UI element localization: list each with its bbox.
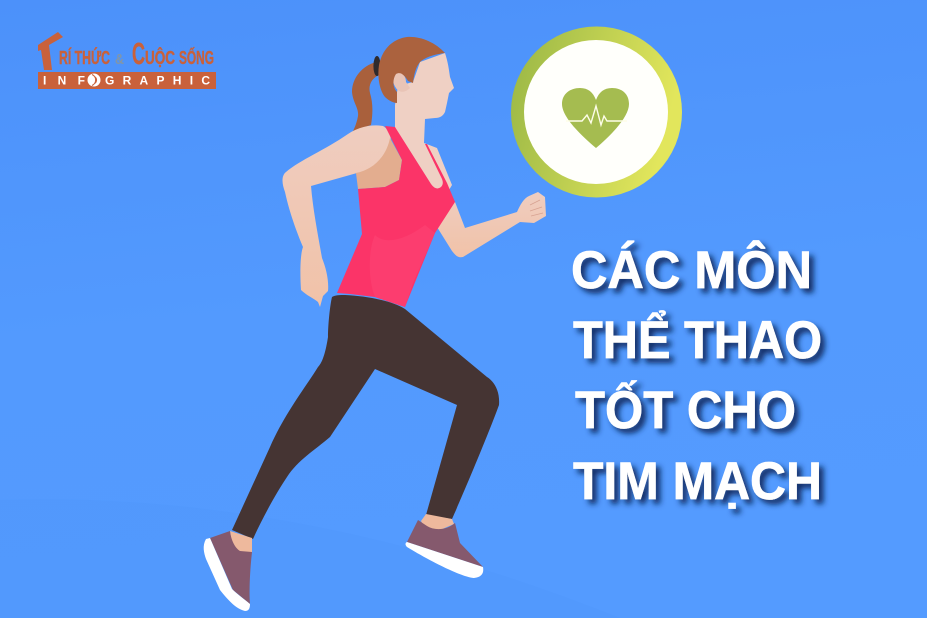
back arm — [282, 125, 391, 307]
logo infographic text: INF — [43, 74, 85, 88]
logo — [38, 32, 216, 89]
front shoe sole — [406, 542, 483, 578]
underarm shade — [356, 138, 402, 189]
top shading — [370, 225, 435, 307]
heart icon badge — [511, 26, 682, 198]
hand detail — [530, 200, 543, 216]
title line 4: TIM MẠCH — [573, 452, 822, 511]
logo infographic bar — [38, 72, 216, 89]
front shoe — [407, 520, 483, 567]
title line 3: TỐT CHO — [575, 380, 796, 440]
logo words tri thuc: RÍ THỨC — [59, 47, 110, 68]
logo word song: SỐNG — [179, 47, 214, 68]
ponytail — [352, 62, 379, 131]
logo wordmark — [59, 36, 214, 71]
hair tie — [373, 56, 381, 76]
logo roof letter T — [38, 32, 63, 70]
back ankle — [230, 531, 252, 553]
ear — [393, 72, 410, 92]
leggings — [232, 295, 499, 539]
pink tank top — [337, 126, 455, 307]
runner figure — [204, 37, 546, 611]
green ring — [511, 26, 682, 198]
logo target icon — [88, 74, 100, 86]
white disc — [524, 40, 668, 184]
title — [571, 239, 822, 511]
heart — [562, 88, 629, 148]
heartbeat line — [566, 106, 627, 125]
front ankle — [421, 514, 454, 530]
front arm — [437, 192, 546, 257]
neck, face and chest — [395, 53, 454, 205]
logo word cuoc: UỘC — [145, 47, 175, 68]
logo graphic text: GRAPHIC — [105, 74, 210, 88]
back shoe — [210, 531, 252, 604]
title line 1: CÁC MÔN — [571, 239, 812, 300]
back shoe sole — [204, 538, 250, 611]
logo ampersand: & — [115, 51, 124, 68]
logo large letter C: C — [132, 36, 145, 71]
hair — [378, 37, 445, 103]
title line 2: THỂ THAO — [573, 310, 822, 370]
